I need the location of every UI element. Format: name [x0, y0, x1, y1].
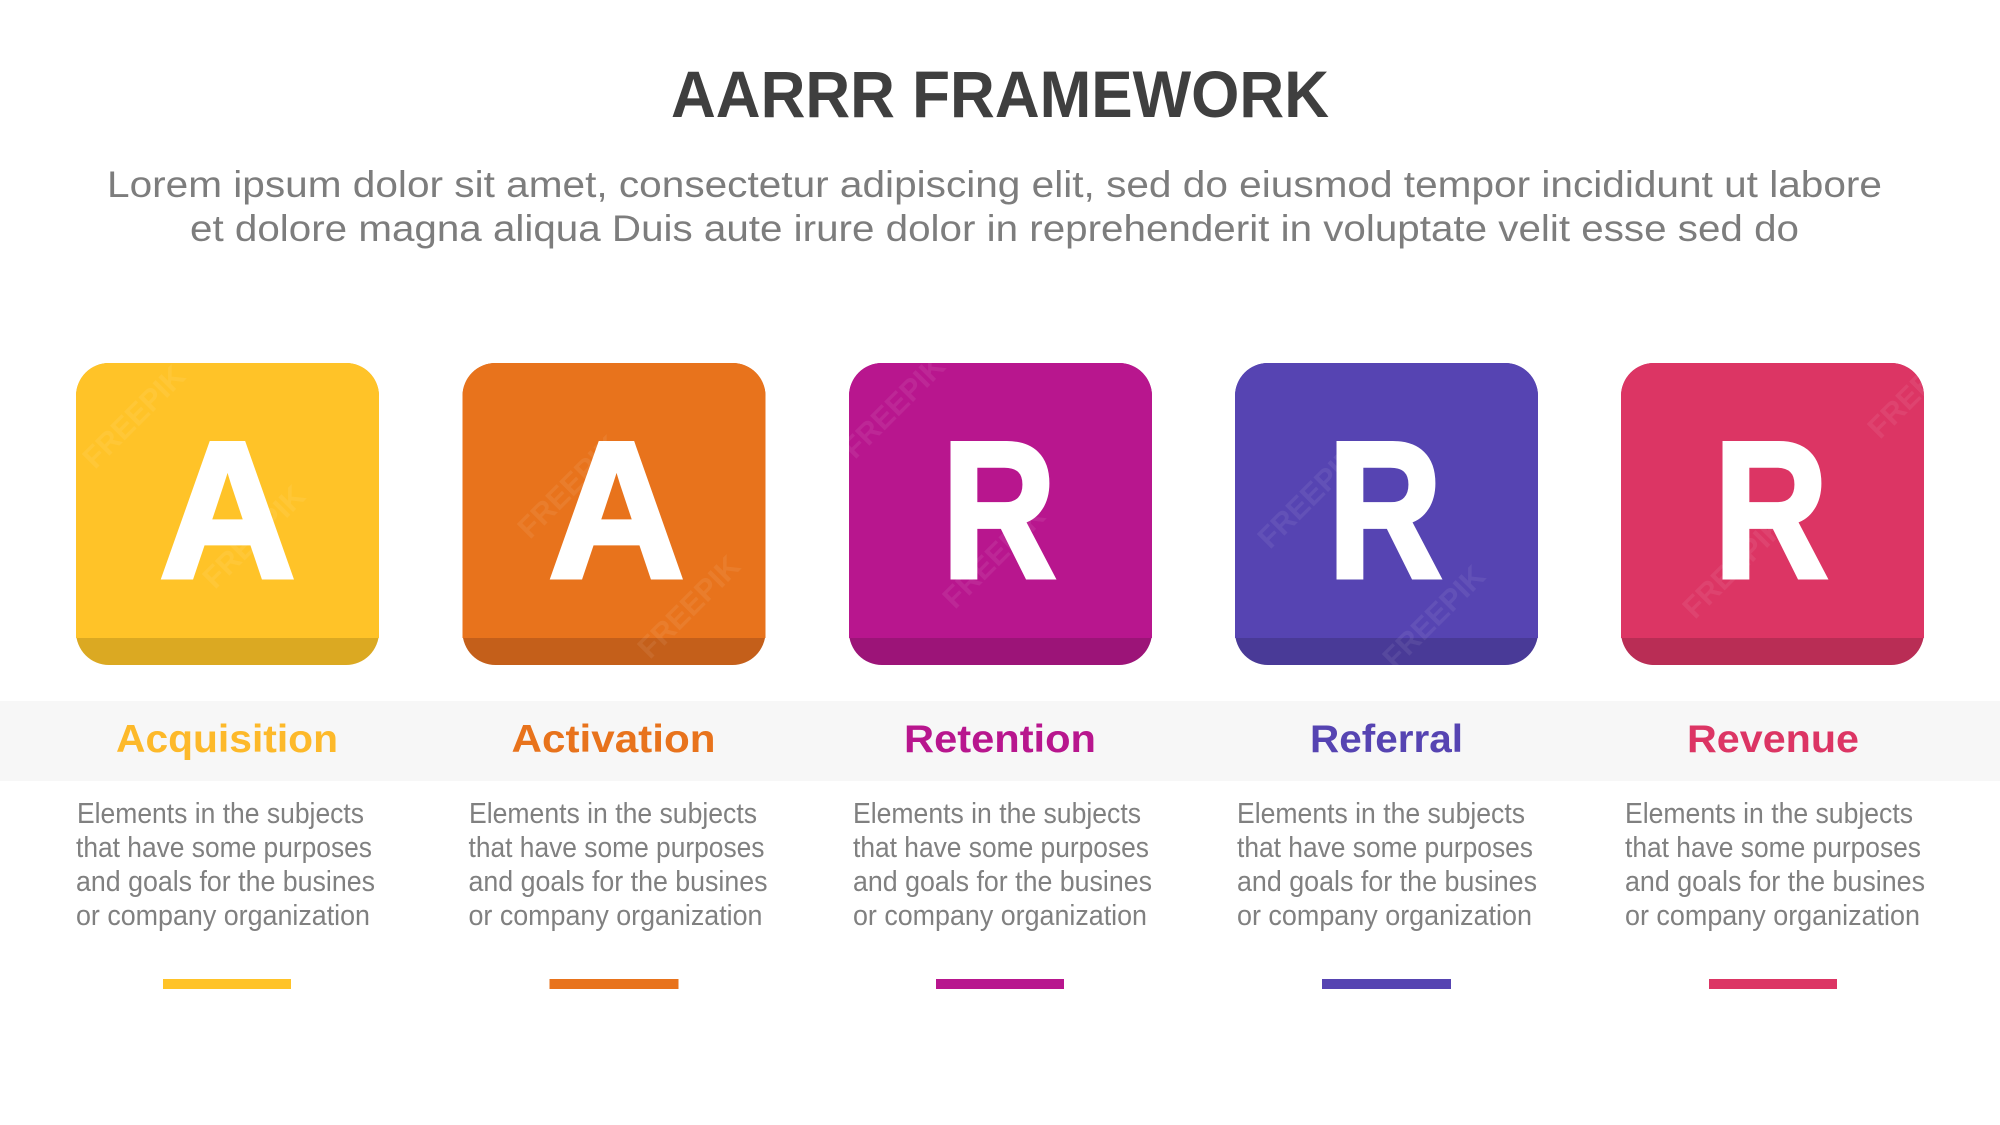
- icon: R tile: FREEPIK: [837, 349, 952, 465]
- panel: referral: [1235, 363, 1538, 989]
- text block: or company organization: [468, 900, 762, 932]
- label band: [0, 701, 2000, 781]
- text block: and goals for the busines: [468, 866, 768, 898]
- icon: R tile: FREEPIK: [1862, 329, 1977, 445]
- text block: or company organization: [1237, 900, 1532, 932]
- icon: A tile: A: [548, 402, 684, 619]
- icon: R tile: R: [1714, 402, 1828, 619]
- text block: Elements in the subjects: [853, 798, 1141, 830]
- text block: [468, 798, 768, 932]
- icon: R tile: [1621, 329, 1977, 665]
- text block: that have some purposes: [853, 832, 1149, 864]
- icon: R tile: FREEPIK: [937, 499, 1052, 615]
- accent bar: [1322, 979, 1451, 989]
- text block: and goals for the busines: [1625, 866, 1925, 898]
- accent bar: [550, 979, 678, 989]
- icon: R tile: FREEPIK: [1377, 559, 1492, 675]
- text block: that have some purposes: [1237, 832, 1533, 864]
- heading: Retention: Retention: [904, 718, 1096, 761]
- panel: retention: [837, 349, 1152, 989]
- accent bar: [163, 979, 291, 989]
- text block: [1625, 798, 1925, 932]
- accent bar: [936, 979, 1064, 989]
- icon: A tile: FREEPIK: [632, 549, 747, 665]
- panel: revenue: [1621, 329, 1977, 989]
- icon: R tile: FREEPIK: [1252, 439, 1367, 555]
- icon: R tile: [837, 349, 1152, 665]
- panel: acquisition: [76, 359, 379, 989]
- icon: A tile: FREEPIK: [512, 429, 627, 545]
- subtitle: [107, 164, 1882, 249]
- text block: that have some purposes: [1625, 832, 1921, 864]
- text block: [1237, 798, 1537, 932]
- text block: Elements in the subjects: [77, 798, 364, 830]
- icon: A tile: FREEPIK: [197, 479, 312, 595]
- icon: R tile: [1235, 363, 1538, 675]
- icon: A tile: [462, 363, 766, 665]
- text block: Elements in the subjects: [1237, 798, 1525, 830]
- text block: and goals for the busines: [1237, 866, 1537, 898]
- icon: A tile: A: [160, 402, 296, 619]
- title: AARRR FRAMEWORK: [671, 57, 1329, 131]
- text block: and goals for the busines: [853, 866, 1152, 898]
- text block: [853, 798, 1152, 932]
- icon: A tile: FREEPIK: [77, 359, 192, 475]
- icon: R tile: R: [942, 402, 1056, 619]
- text block: or company organization: [853, 900, 1147, 932]
- heading: Activation: Activation: [512, 718, 716, 761]
- text block: that have some purposes: [76, 832, 372, 864]
- text block: and goals for the busines: [76, 866, 375, 898]
- text block: or company organization: [1625, 900, 1920, 932]
- accent bar: [1709, 979, 1837, 989]
- icon: A tile: [76, 359, 379, 665]
- heading: Revenue: Revenue: [1687, 718, 1859, 761]
- subtitle: et dolore magna aliqua Duis aute irure dolor in reprehenderit in voluptate velit esse sed do: [190, 208, 1799, 249]
- text block: Elements in the subjects: [469, 798, 757, 830]
- heading: Referral: Referral: [1310, 718, 1463, 761]
- text block: that have some purposes: [468, 832, 764, 864]
- text block: Elements in the subjects: [1625, 798, 1913, 830]
- subtitle: Lorem ipsum dolor sit amet, consectetur adipiscing elit, sed do eiusmod tempor incididunt ut labore: [107, 164, 1882, 205]
- icon: R tile: FREEPIK: [1677, 509, 1792, 625]
- panel: activation: [462, 363, 768, 989]
- text block: [76, 798, 375, 932]
- heading: Acquisition: Acquisition: [116, 718, 338, 761]
- text block: or company organization: [76, 900, 370, 932]
- icon: R tile: R: [1328, 402, 1442, 619]
